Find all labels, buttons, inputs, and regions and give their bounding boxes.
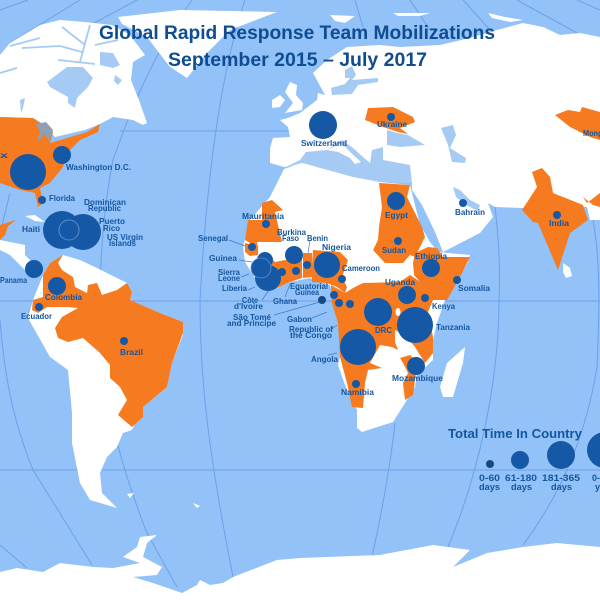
country labels: Guinea — [295, 287, 319, 297]
usa — [0, 117, 100, 207]
country labels: Côte — [242, 295, 258, 305]
country labels: Sierra — [218, 267, 240, 277]
legend labels: 61-180 — [505, 473, 537, 483]
country labels: Ecuador — [21, 311, 53, 321]
country labels: Colombia — [45, 292, 82, 302]
country labels: Equatorial — [290, 281, 328, 291]
country labels: Angola — [311, 354, 338, 364]
legend labels — [479, 473, 600, 492]
legend labels: days — [511, 482, 532, 492]
country labels: Dominican — [84, 197, 126, 207]
country labels: Ethiopia — [415, 251, 447, 261]
circles: caribbean — [43, 211, 81, 249]
title: September 2015 – July 2017 — [168, 50, 427, 71]
country labels: Brazil — [120, 347, 143, 357]
myanmar — [583, 193, 600, 207]
circles: asia and europe — [459, 199, 467, 207]
central africa — [331, 275, 433, 408]
country labels: Ukraine — [377, 119, 407, 129]
legend labels: 181-365 — [542, 473, 580, 483]
country labels: Switzerland — [301, 138, 347, 148]
country labels: Burkina — [277, 227, 306, 237]
country labels: São Tomé — [233, 312, 271, 322]
country labels: Ghana — [273, 296, 297, 306]
legend labels: days — [479, 482, 500, 492]
land: africa — [243, 163, 470, 432]
country labels: Panama — [0, 275, 27, 285]
country labels: the Congo — [290, 330, 332, 340]
legend heading: Total Time In Country — [448, 427, 582, 441]
mobilization circles — [10, 111, 561, 388]
highlighted countries — [0, 107, 600, 427]
ukraine — [365, 107, 415, 134]
country labels: US Virgin — [107, 232, 143, 242]
circle: mexico and usa — [10, 154, 46, 190]
country labels: Kenya — [432, 301, 455, 311]
land: south america — [28, 255, 183, 508]
india — [522, 168, 588, 270]
title: Global Rapid Response Team Mobilizations — [99, 23, 495, 44]
country labels: Liberia — [222, 283, 247, 293]
land: north america — [0, 20, 147, 270]
country labels: Guinea — [209, 253, 237, 263]
east africa — [413, 247, 470, 300]
country labels: d'Ivoire — [234, 301, 263, 311]
nigeria cameroon — [312, 250, 348, 293]
country labels: India — [549, 218, 569, 228]
country labels: Senegal — [198, 233, 228, 243]
country labels: Somalia — [458, 283, 490, 293]
country labels: x — [0, 150, 8, 160]
country labels: Cameroon — [342, 263, 380, 273]
country labels: Nigeria — [322, 242, 351, 252]
land: madagascar and sri lanka — [440, 263, 572, 397]
land: greenland — [118, 10, 277, 78]
land: antarctica — [0, 535, 600, 600]
country labels: Florida — [49, 193, 75, 203]
country labels: Bahrain — [455, 207, 485, 217]
west africa — [253, 255, 302, 290]
country labels: Uganda — [385, 277, 415, 287]
circles: west africa — [262, 220, 270, 228]
country labels: and Principe — [227, 318, 276, 328]
country labels: Benin — [307, 233, 328, 243]
country labels: Republic of — [289, 324, 333, 334]
legend labels: days — [551, 482, 572, 492]
country labels: Rico — [103, 223, 120, 233]
country labels: Republic — [88, 203, 121, 213]
country labels: Islands — [109, 238, 136, 248]
country labels: Gabon — [287, 314, 312, 324]
land: british isles — [272, 82, 303, 113]
benin — [303, 253, 312, 278]
legend: total time in country — [448, 427, 600, 492]
land: eurasia — [270, 23, 600, 252]
mozambique — [400, 355, 420, 400]
mexico — [0, 220, 16, 240]
egypt sudan — [373, 183, 425, 263]
country labels: Washington D.C. — [66, 162, 131, 172]
colombia and brazil — [32, 255, 183, 427]
title — [99, 23, 495, 71]
country labels: Mozambique — [392, 373, 443, 383]
country labels: Haiti — [22, 224, 40, 234]
land: arctic islands — [127, 13, 523, 508]
country labels: Puerto — [99, 216, 125, 226]
senegal guinea — [245, 243, 258, 256]
legend labels: 0-60 — [479, 473, 500, 483]
country labels: Egypt — [385, 210, 408, 220]
country labels: Sudan — [382, 245, 406, 255]
country labels: Faso — [282, 233, 299, 243]
country labels: Mauritania — [242, 211, 284, 221]
legend circles — [486, 432, 600, 469]
mauritania — [245, 200, 283, 248]
country labels: Tanzania — [436, 322, 470, 332]
mongolia — [555, 107, 600, 140]
country labels: Namibia — [341, 387, 374, 397]
country labels: Leone — [218, 273, 240, 283]
circles: central and east africa — [364, 298, 392, 326]
leader lines — [229, 240, 337, 355]
country labels: DRC — [375, 325, 392, 335]
country labels — [0, 119, 600, 397]
